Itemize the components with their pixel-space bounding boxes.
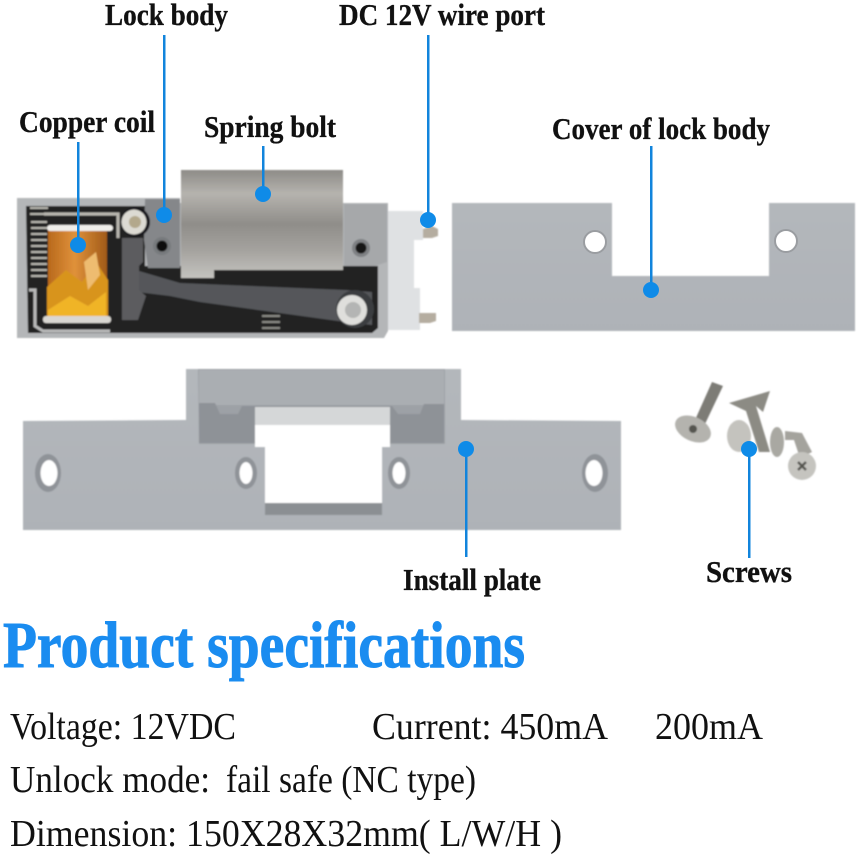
callout: install plate: Install plate (403, 562, 541, 597)
copper coil (48, 227, 107, 316)
spec: dimension: Dimension: 150X28X32mm( L/W/H ) (10, 813, 562, 855)
panel: cover of lock body photo (452, 203, 855, 331)
callout: DC 12V wire port (339, 0, 546, 228)
spec: second current: 200mA (655, 706, 764, 748)
panel: lock body photo (17, 170, 438, 338)
internal lever (137, 271, 372, 325)
white terminal block (388, 211, 423, 330)
spec: current: Current: 450mA (372, 706, 609, 748)
callout: screws: Screws (706, 554, 792, 589)
metal case (17, 198, 388, 338)
roller (336, 290, 374, 328)
spec: unlock mode: Unlock mode: (10, 759, 210, 801)
callout: install plate (403, 441, 541, 597)
panel: install plate photo (23, 369, 621, 530)
spec: voltage: Voltage: 12VDC (10, 706, 236, 748)
round pivot pin (120, 207, 150, 237)
spring bolt (181, 170, 343, 278)
dark interior (26, 206, 378, 333)
return spring (30, 208, 280, 328)
text block: specifications (10, 706, 764, 855)
callout: spring bolt: Spring bolt (204, 109, 337, 144)
terminal tabs (419, 226, 438, 323)
cover holes (584, 230, 797, 253)
callout: screws (706, 441, 792, 589)
callout: spring bolt (204, 109, 337, 202)
callout: cover of lock body (552, 111, 770, 298)
callout: cover of lock body: Cover of lock body (552, 111, 770, 146)
callout: copper coil: Copper coil (19, 104, 155, 139)
callout: copper coil (19, 104, 155, 253)
screw holes (153, 237, 171, 255)
heading: product specifications: Product specifications (3, 609, 525, 682)
callout: lock body (105, 0, 228, 223)
panel: screws photo (671, 382, 816, 480)
spec: fail safe: fail safe (NC type) (226, 759, 476, 801)
